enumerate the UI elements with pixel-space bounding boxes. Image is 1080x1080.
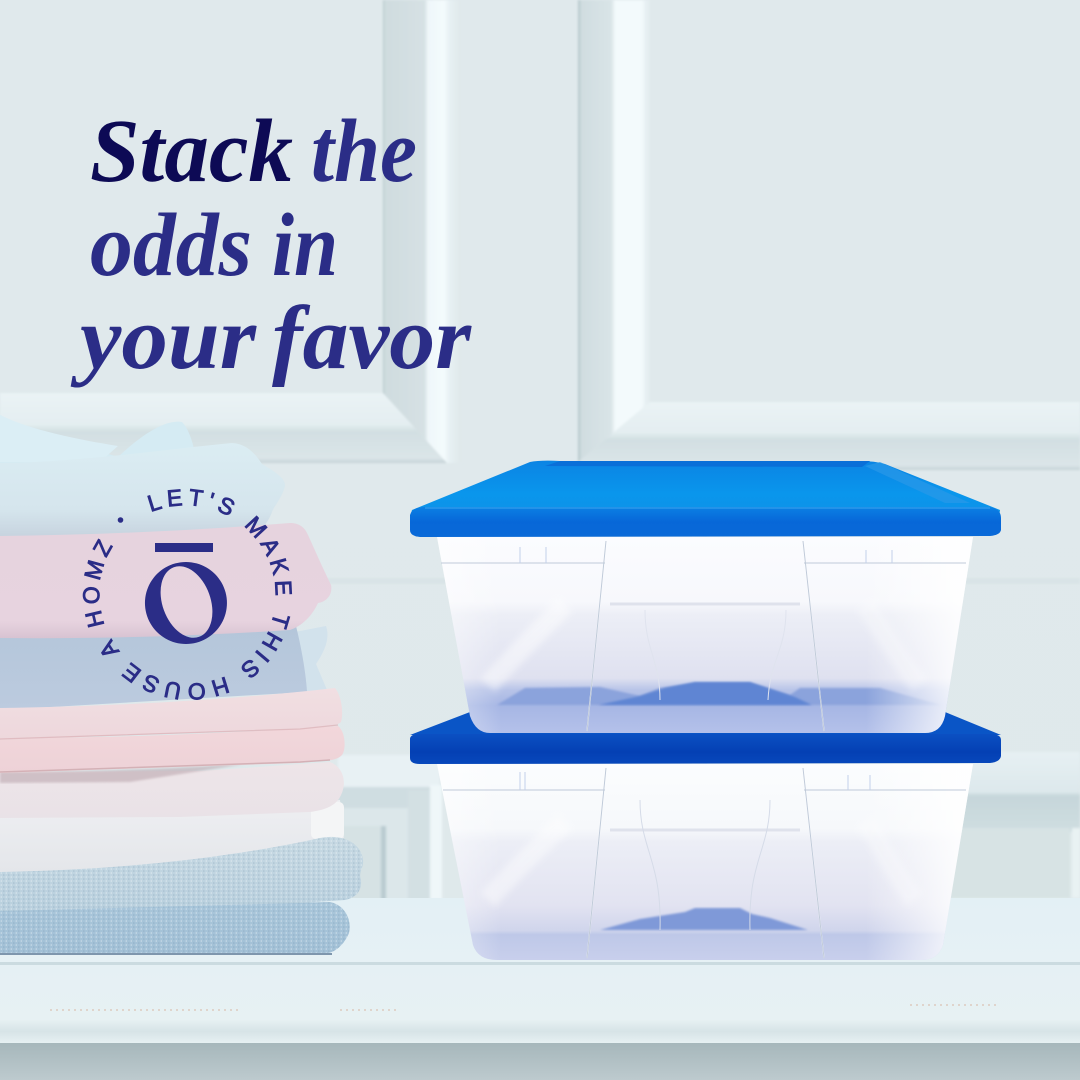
lower lid [410,712,1001,764]
top folded cloth [0,415,194,470]
upper storage box [437,537,973,733]
heading [70,102,472,388]
upper lid top face [411,461,1000,516]
lower box ribs [488,768,915,958]
shelf wear marks [50,1005,1000,1010]
logo macron bar [155,543,213,552]
wainscot rail [0,578,1080,584]
heading word: your: your [70,289,257,388]
folded clothes stack [0,415,363,955]
circular logo badge [82,488,292,700]
pink knit lower [0,726,345,773]
heading word: odds: odds [90,196,252,295]
off-white shirt [0,762,344,818]
bottom blue knit [0,902,350,955]
heading word: Stack: Stack [90,102,293,201]
pink knit upper [0,688,342,740]
circular slogan: LET'S MAKE THIS HOUSE A HOMZ [82,488,292,700]
upper box body [437,537,973,733]
upper box ribs [488,541,920,731]
lower box body [437,764,973,960]
lower lid top face [410,712,1001,735]
separator dot [118,517,123,523]
lower storage box [437,764,973,960]
lower moulding right [950,752,1080,898]
pink shirt [0,523,331,638]
blue-grey shirt [0,626,307,710]
white shirt with collar [0,800,344,873]
upper lid [410,461,1001,537]
heading word: the: the [311,102,417,201]
lower moulding left [338,755,442,900]
right wall panel moulding [578,0,1080,470]
shelf [0,898,1080,1080]
logo letter o [145,562,227,644]
lower box floor patch [600,908,808,930]
left wall panel moulding [0,0,461,463]
light blue shirt [0,443,285,538]
lower lid front band [410,734,1001,764]
heading word: in: in [272,196,338,295]
side cloth behind blue-grey shirt [295,626,327,695]
upper box floor patch [497,683,941,705]
upper lid front band [410,507,1001,537]
mid blue knit [0,837,363,911]
heading word: favor: favor [272,289,472,388]
